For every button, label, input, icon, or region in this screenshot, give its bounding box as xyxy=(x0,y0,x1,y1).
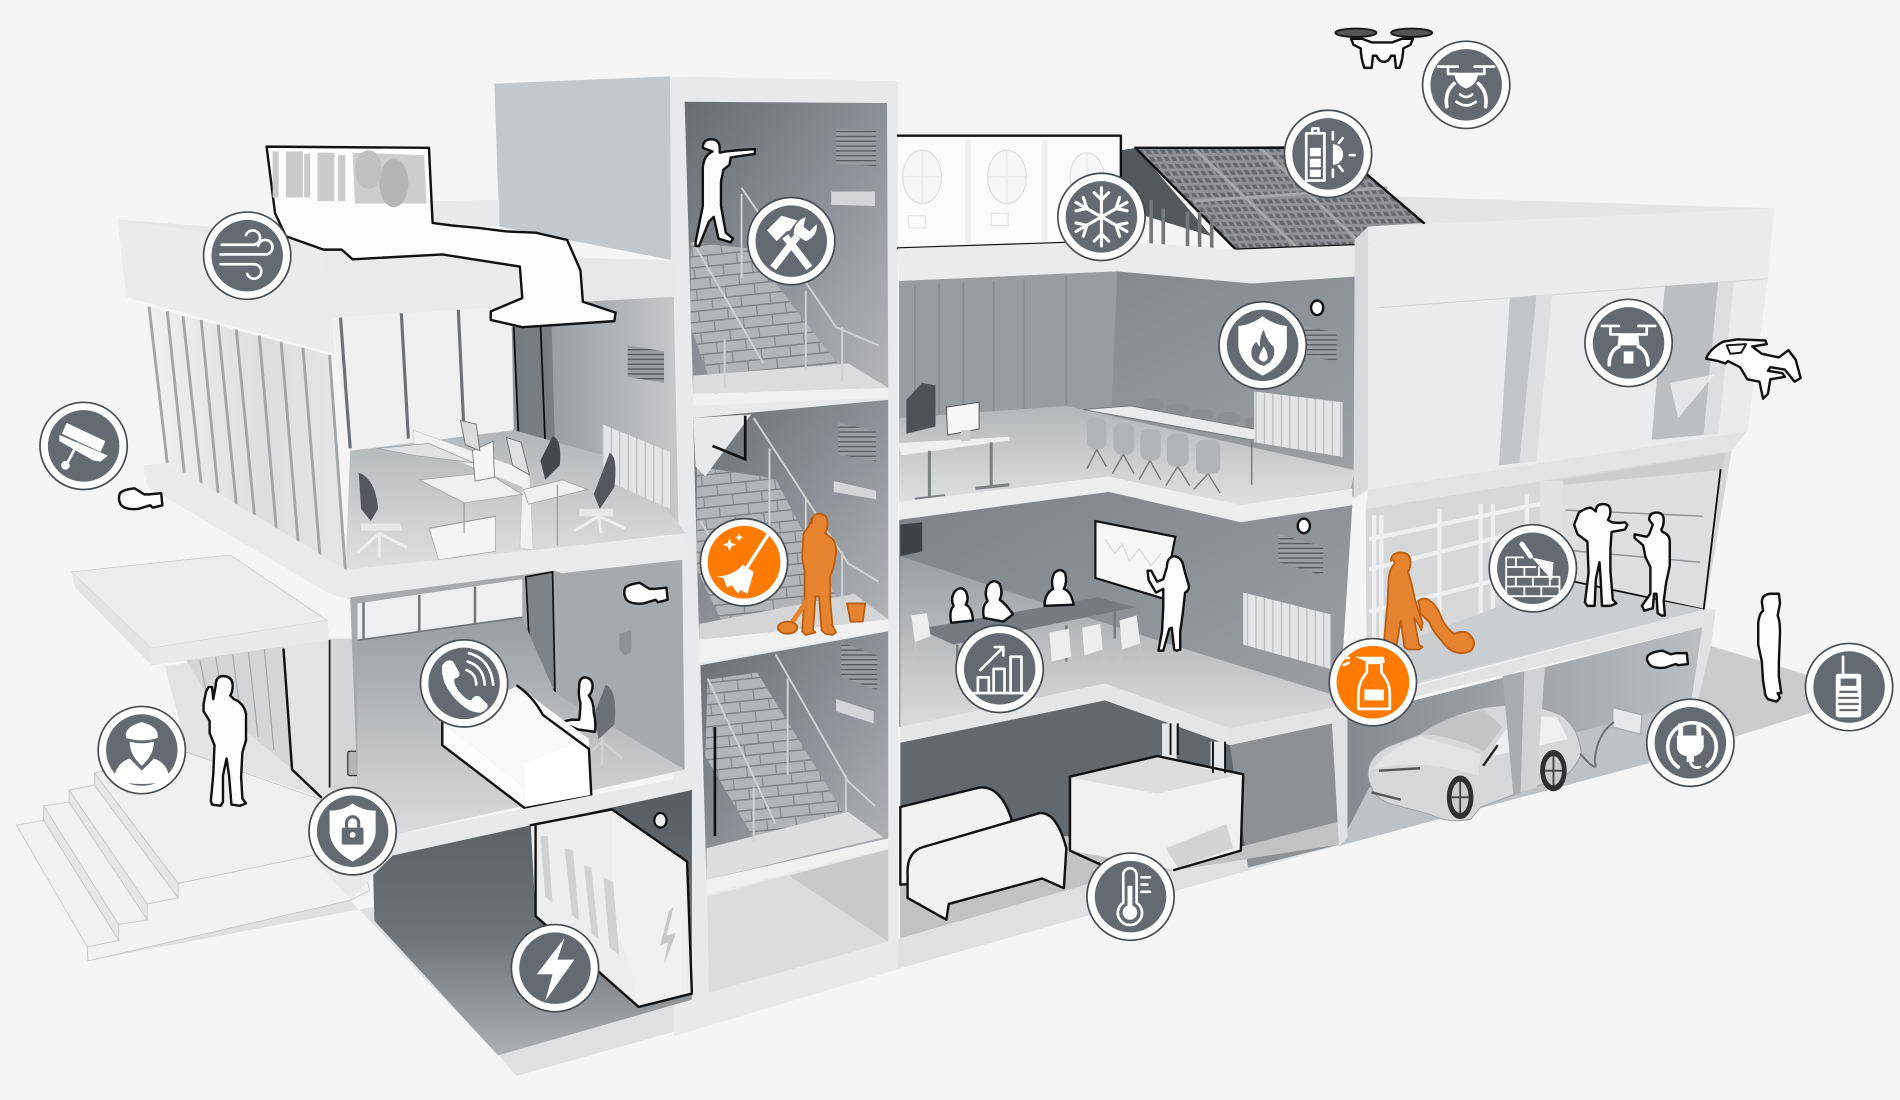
whiteboard xyxy=(1095,521,1175,599)
orange floor cleaner xyxy=(1384,553,1474,653)
icon: phone xyxy=(420,640,508,727)
drone right xyxy=(1706,339,1801,399)
windows xyxy=(1499,296,1536,465)
smoke detector xyxy=(654,813,666,828)
icon: bricks and trowel xyxy=(1489,525,1576,612)
icon: shield lock xyxy=(309,788,396,875)
column xyxy=(1692,609,1716,699)
entrance canopy xyxy=(72,555,330,665)
garage pillar xyxy=(1503,671,1524,796)
right wing slab xyxy=(1366,431,1747,509)
vents xyxy=(836,128,876,166)
roof chiller units xyxy=(898,135,1121,248)
stair flights xyxy=(691,242,842,394)
garage lower bay xyxy=(1332,626,1705,846)
guard silhouette xyxy=(204,676,246,806)
door keypad xyxy=(348,751,359,776)
stair shafts xyxy=(685,102,888,992)
conference table xyxy=(1083,399,1295,493)
wall units xyxy=(831,191,875,206)
reception slab xyxy=(313,776,692,900)
left balcony slab xyxy=(143,463,691,600)
building base band xyxy=(87,697,1812,1076)
upper left office xyxy=(149,297,686,572)
icon: broom xyxy=(700,519,788,606)
middle roof slab xyxy=(898,241,1368,284)
icon: EV plug xyxy=(1647,699,1734,786)
middle upper room xyxy=(899,271,1360,505)
landing floors xyxy=(693,364,888,394)
white stair soffit and door frame xyxy=(693,414,751,476)
reception desk xyxy=(442,686,591,808)
office chairs xyxy=(357,436,625,557)
camera left xyxy=(119,488,162,509)
garage upper room xyxy=(1357,451,1732,703)
wall sensor xyxy=(619,630,631,656)
reception room xyxy=(350,560,685,835)
icon: radio xyxy=(1805,643,1893,731)
right slab front xyxy=(1230,609,1705,745)
right wing facade xyxy=(1354,208,1774,499)
middle slab front xyxy=(900,683,1339,745)
icon: growth chart xyxy=(956,625,1043,712)
right wing roof xyxy=(1368,196,1774,227)
radiator and vent xyxy=(1243,593,1330,669)
icon: snowflake xyxy=(1058,173,1145,261)
workers xyxy=(1574,504,1670,616)
handrails xyxy=(693,188,879,842)
vent xyxy=(628,345,664,383)
middle upper slab front xyxy=(899,476,1352,522)
tanks xyxy=(900,787,1066,920)
desks xyxy=(377,420,588,560)
middle meeting room xyxy=(899,492,1352,728)
solar array xyxy=(1121,145,1424,250)
outside security figure xyxy=(1758,594,1781,702)
drone top xyxy=(1335,28,1432,68)
inspector with surveying scope xyxy=(696,139,755,246)
stair tower frame xyxy=(670,76,898,1036)
tower rear wall xyxy=(494,76,674,261)
plant room xyxy=(900,700,1339,938)
orange sweeper xyxy=(778,514,865,635)
icon: solar battery xyxy=(1284,110,1372,198)
desk and monitor xyxy=(900,383,1009,499)
icon: wind xyxy=(204,212,291,299)
entrance steps and platform xyxy=(16,752,370,961)
radiator xyxy=(602,424,670,509)
boiler xyxy=(1070,723,1243,875)
left roof parts xyxy=(118,200,674,317)
charger xyxy=(1580,708,1642,767)
upper left parapet xyxy=(118,219,522,354)
ventilation unit and duct xyxy=(267,147,616,327)
vent xyxy=(1304,327,1337,361)
icon: drone signal xyxy=(1423,41,1510,128)
left basement xyxy=(373,790,692,1055)
presenter xyxy=(1148,556,1189,651)
meeting table xyxy=(911,597,1143,679)
receptionist xyxy=(561,677,595,732)
camera reception xyxy=(624,583,668,604)
reception chair xyxy=(585,685,623,766)
icon: spray bottle xyxy=(1329,639,1417,726)
camera garage xyxy=(1647,651,1688,668)
icon: tools xyxy=(748,198,835,285)
car xyxy=(1368,705,1581,821)
icon: lightning xyxy=(511,925,599,1012)
seated staff xyxy=(950,570,1074,623)
icon: security camera xyxy=(40,402,127,490)
entrance glazing xyxy=(165,639,359,797)
radiator xyxy=(1254,391,1343,457)
icon: thermometer xyxy=(1087,853,1174,940)
icon: fire shield xyxy=(1219,302,1306,389)
icon: drone xyxy=(1585,299,1672,387)
smoke detector middle xyxy=(1298,519,1310,533)
shelving xyxy=(1369,494,1563,697)
smoke detector middle upper xyxy=(1311,301,1323,315)
glazing xyxy=(149,307,345,570)
UPS cabinets xyxy=(531,809,692,1007)
outside pavement xyxy=(1696,646,1812,737)
icon: guard xyxy=(98,706,185,794)
